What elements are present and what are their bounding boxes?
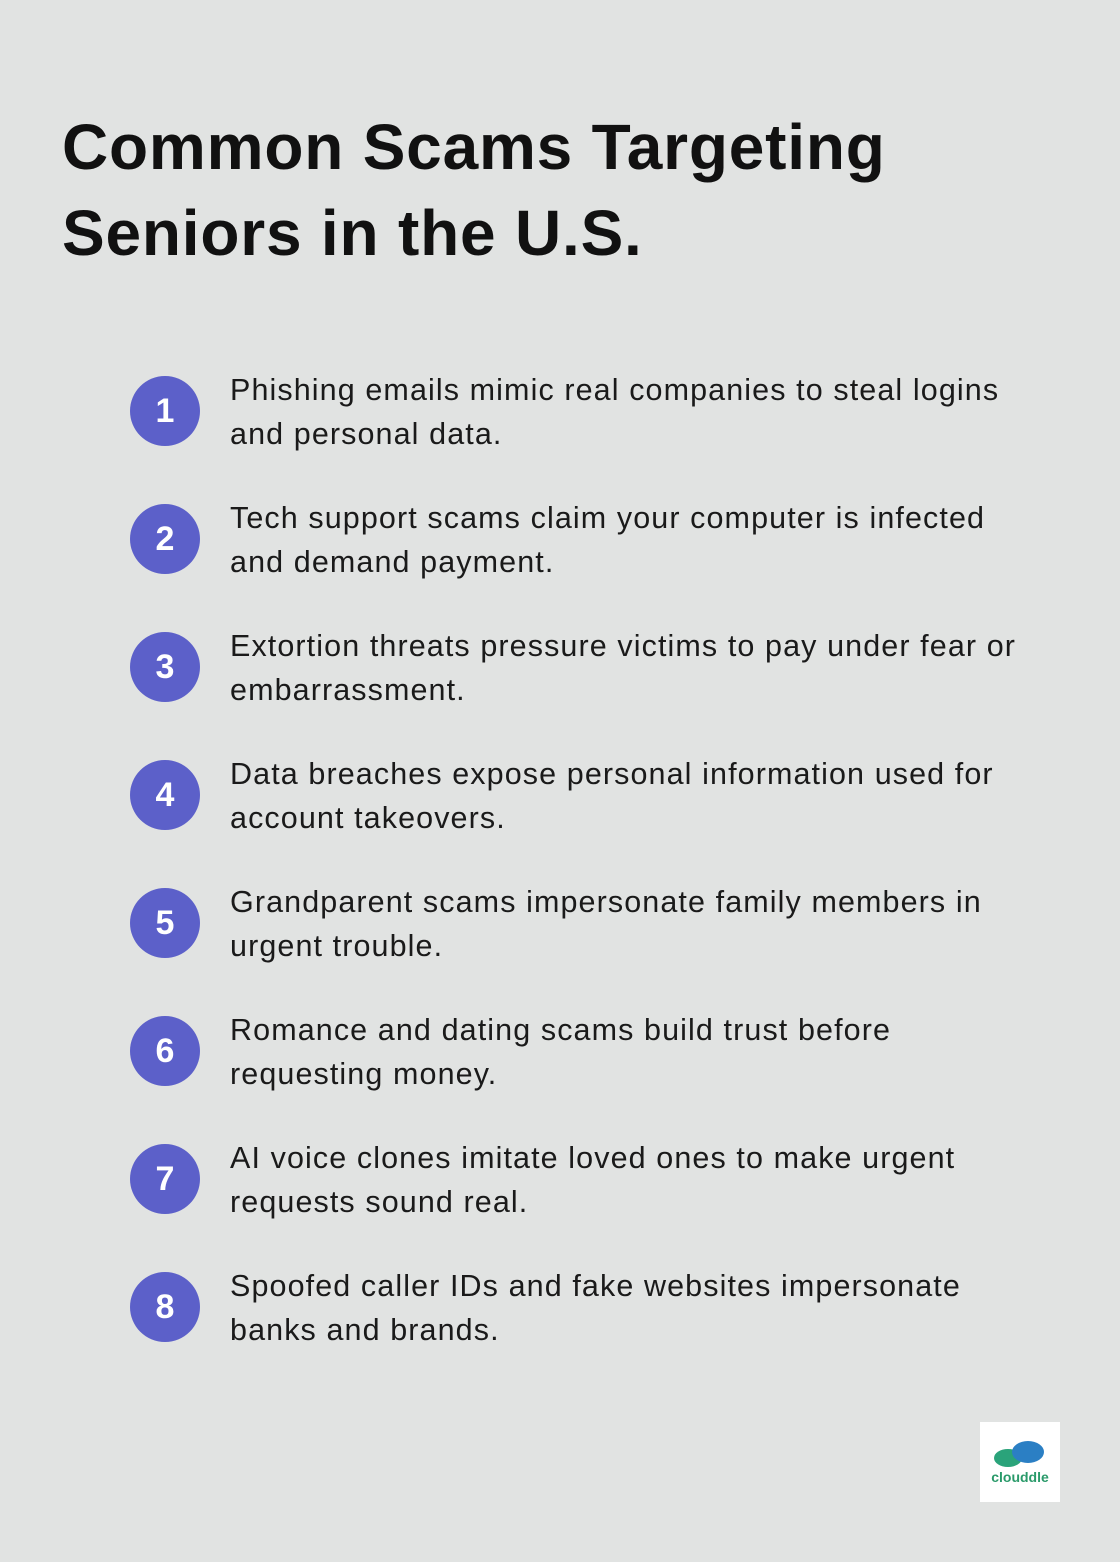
item 2: 2 — [156, 520, 174, 558]
item 5 — [130, 885, 982, 963]
item 4: account takeovers. — [230, 801, 506, 835]
item 4: 4 — [156, 776, 174, 814]
logo: clouddle — [991, 1469, 1049, 1485]
title: Common Scams Targeting — [62, 111, 886, 183]
item 3 — [130, 629, 1016, 707]
title — [62, 111, 886, 269]
item 2 — [130, 501, 985, 579]
item 7: requests sound real. — [230, 1185, 528, 1219]
item 2: and demand payment. — [230, 545, 554, 579]
item 2: Tech support scams claim your computer is infected — [230, 501, 985, 535]
item 8: banks and brands. — [230, 1313, 500, 1347]
item 5: urgent trouble. — [230, 929, 443, 963]
item 4: Data breaches expose personal information used for — [230, 757, 994, 791]
item 4 — [130, 757, 994, 835]
item 7 — [130, 1141, 955, 1219]
item 8 — [130, 1269, 961, 1347]
item 1: Phishing emails mimic real companies to steal logins — [230, 373, 999, 407]
item 8: 8 — [156, 1288, 174, 1326]
item 6: Romance and dating scams build trust before — [230, 1013, 891, 1047]
item 3: 3 — [156, 648, 174, 686]
item 1 — [130, 373, 999, 451]
item 6: requesting money. — [230, 1057, 497, 1091]
item 3: embarrassment. — [230, 673, 466, 707]
title: Seniors in the U.S. — [62, 197, 643, 269]
item 6: 6 — [156, 1032, 174, 1070]
item 8: Spoofed caller IDs and fake websites impersonate — [230, 1269, 961, 1303]
item 6 — [130, 1013, 891, 1091]
logo — [980, 1422, 1060, 1502]
item 1: and personal data. — [230, 417, 502, 451]
item 3: Extortion threats pressure victims to pay under fear or — [230, 629, 1016, 663]
item 1: 1 — [156, 392, 174, 430]
item 7: AI voice clones imitate loved ones to make urgent — [230, 1141, 955, 1175]
item 5: Grandparent scams impersonate family members in — [230, 885, 982, 919]
item 5: 5 — [156, 904, 174, 942]
item 7: 7 — [156, 1160, 174, 1198]
